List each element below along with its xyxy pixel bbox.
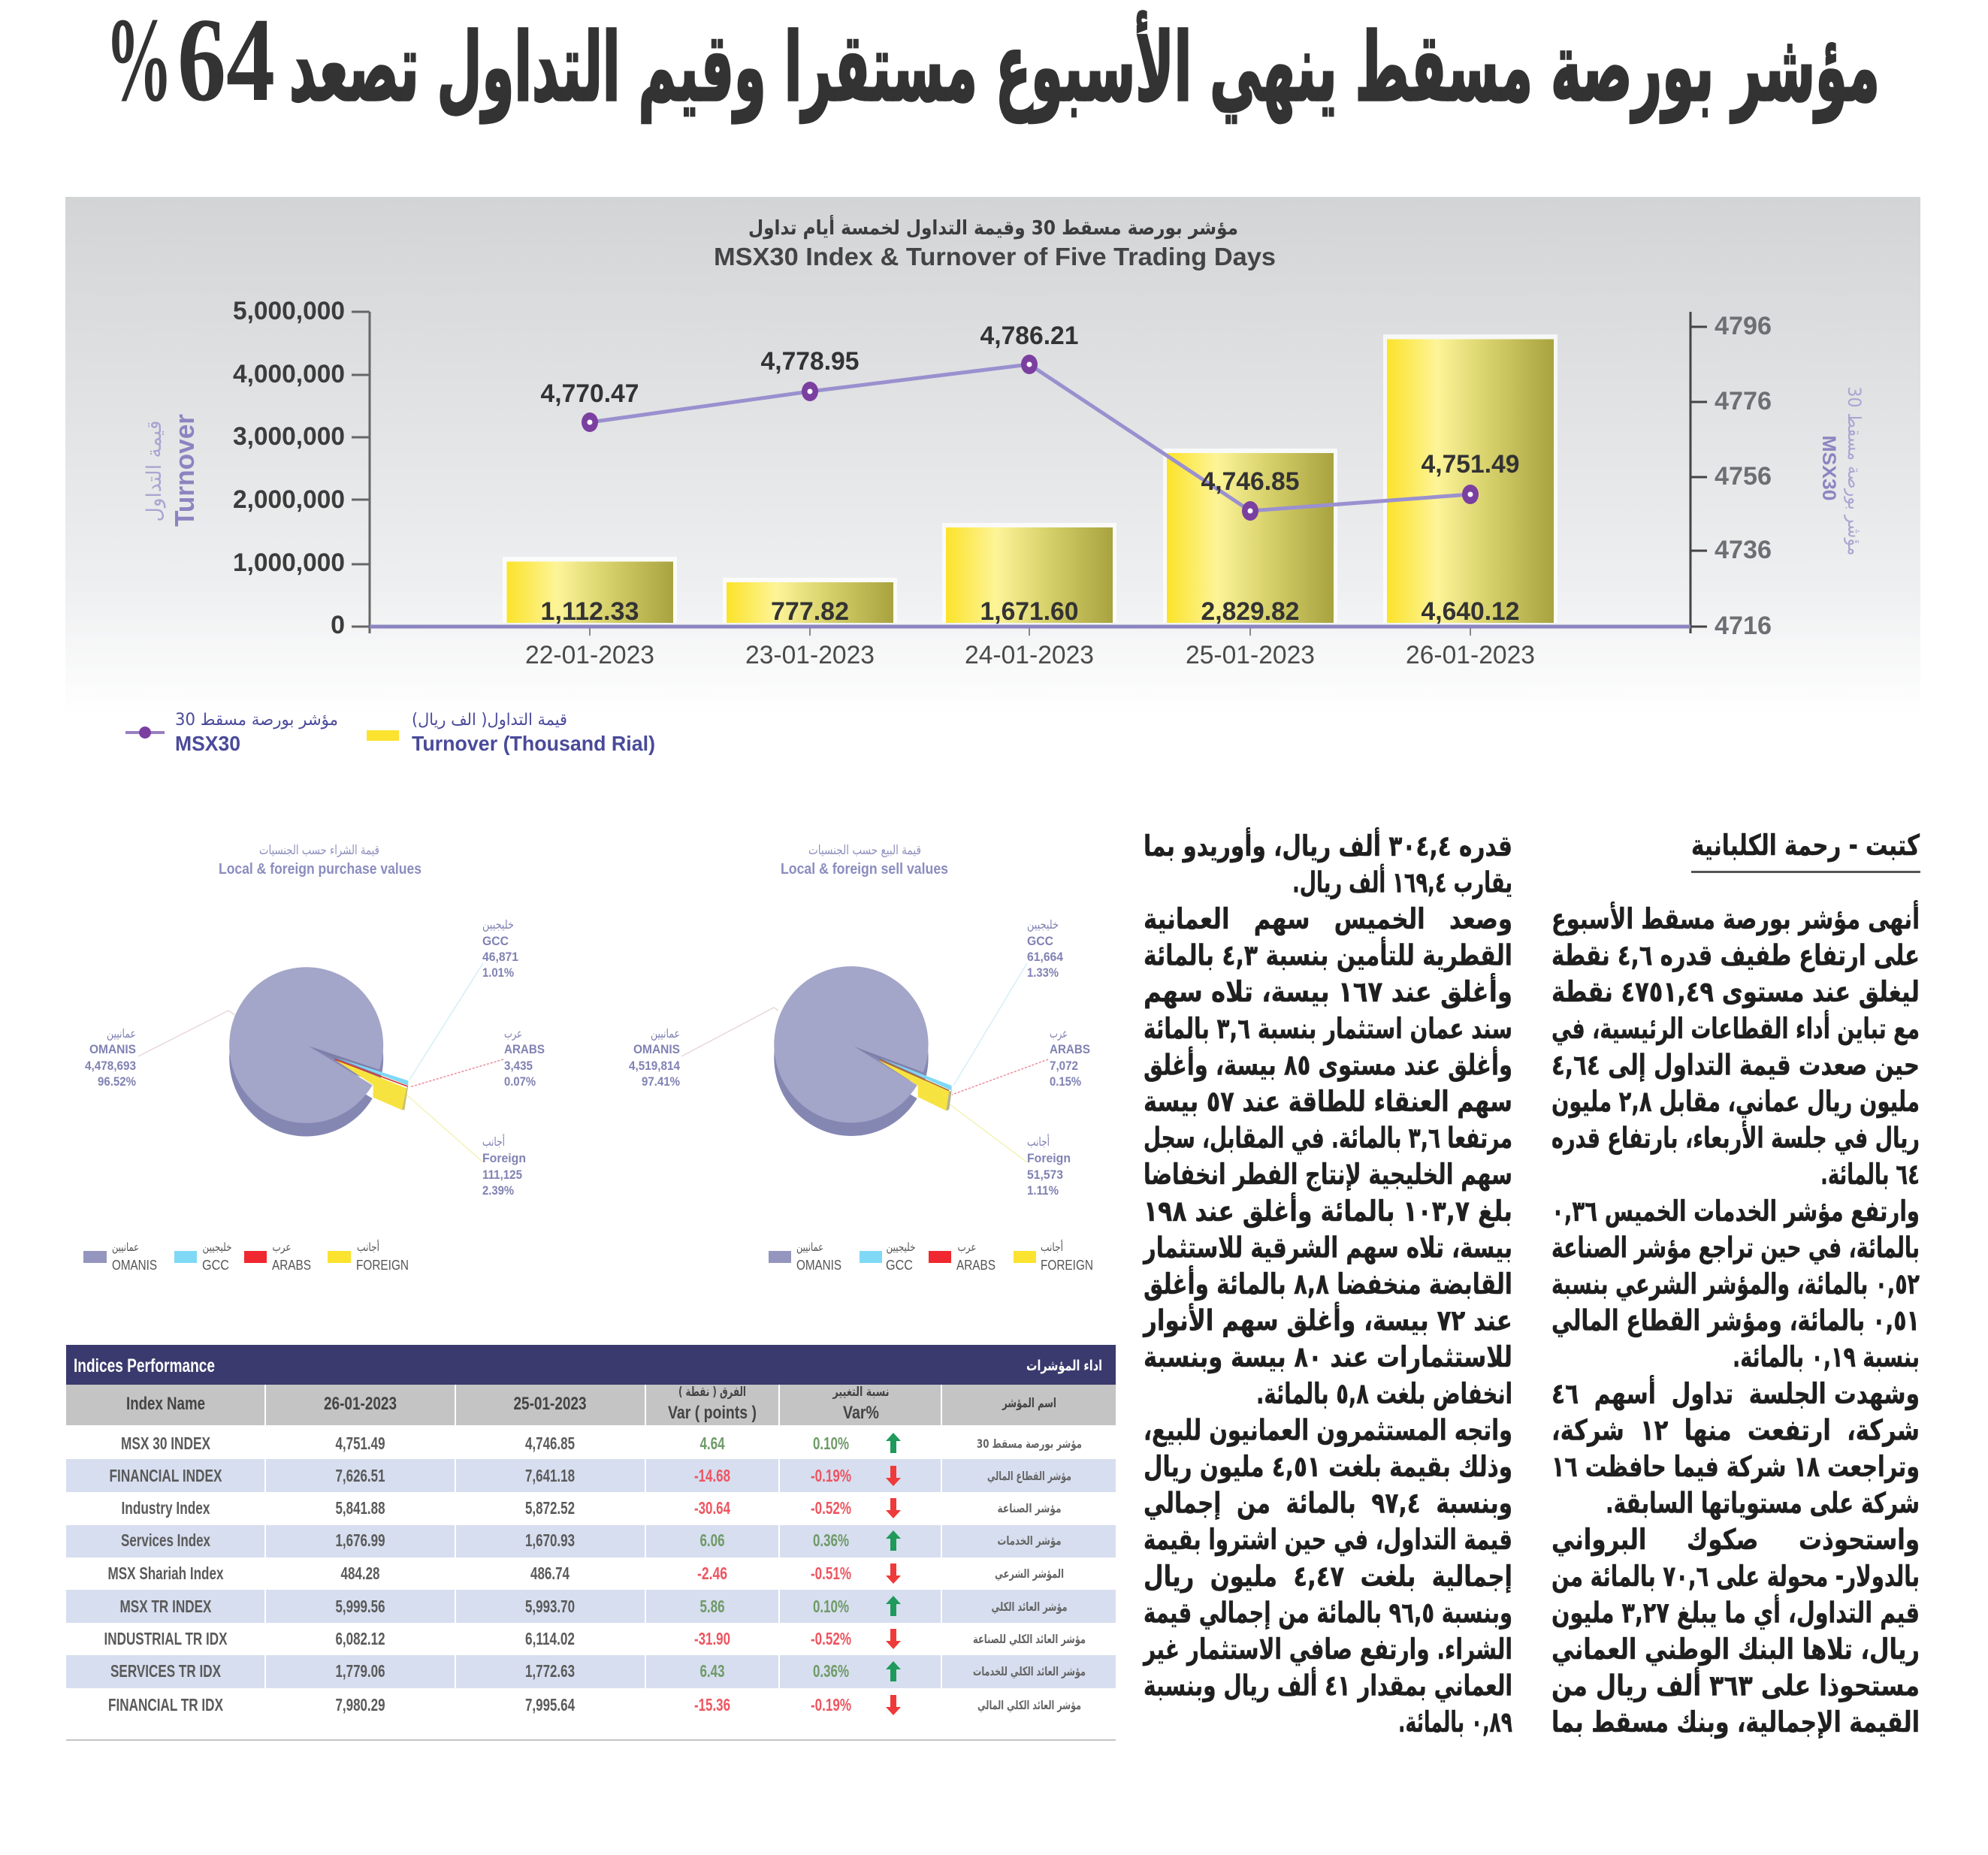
text block: right article column: ٦٤ بالمائة. [1820, 1158, 1920, 1191]
labels [629, 917, 1090, 1198]
row: SERVICES TR IDX: 6.43 [700, 1661, 724, 1681]
pie [229, 967, 408, 1137]
turnover value labels: 4,640.12 [1422, 597, 1519, 626]
text block: left article column: بيسة، تلاه سهم الشرقية للاستثمار [1142, 1231, 1512, 1264]
row: FINANCIAL INDEX: 7,641.18 [525, 1466, 575, 1485]
labels: 0.07% [504, 1074, 536, 1089]
row: MSX TR INDEX: 5.86 [700, 1597, 724, 1616]
table header: 25-01-2023 [514, 1394, 586, 1414]
index value labels: 4,770.47 [541, 379, 639, 408]
row: Services Index: 0.36% [813, 1530, 849, 1550]
baseline [370, 625, 1690, 628]
heading: قيمة الشراء حسب الجنسيات [259, 843, 379, 858]
row: MSX TR INDEX [120, 1596, 1067, 1616]
row: MSX Shariah Index: MSX Shariah Index [108, 1563, 224, 1583]
table header: نسبة التغيير [832, 1385, 890, 1400]
labels: ARABS [1050, 1042, 1090, 1056]
right axis titles: مؤشر بورصة مسقط 30 [1844, 386, 1865, 556]
row: SERVICES TR IDX [110, 1661, 1086, 1681]
row: MSX TR INDEX: MSX TR INDEX [120, 1597, 212, 1616]
chart legend: Turnover (Thousand Rial) [412, 732, 655, 755]
row: Industry Index: -30.64 [694, 1498, 730, 1518]
row: MSX Shariah Index: 486.74 [530, 1563, 570, 1583]
row: MSX TR INDEX: 0.10% [813, 1597, 849, 1616]
line: MSX30 index [582, 355, 1479, 521]
row: MSX TR INDEX: مؤشر العائد الكلي [992, 1600, 1067, 1615]
labels: 51,573 [1027, 1168, 1063, 1182]
turnover value labels: 1,112.33 [541, 597, 639, 626]
row: MSX Shariah Index: 484.28 [341, 1563, 380, 1583]
row: MSX 30 INDEX [121, 1433, 1082, 1453]
right axis [1690, 312, 1772, 640]
heading [781, 843, 948, 878]
legend: عمانيين [112, 1240, 139, 1254]
labels: 1.11% [1027, 1183, 1059, 1198]
text block: left article column: سهم العنقاء للطاقة عند ٥٧ بيسة [1144, 1085, 1512, 1119]
text block: left article column: إجمالية بلغت ٤,٤٧ مليون ريال [1144, 1560, 1512, 1594]
labels: عمانيين [651, 1026, 680, 1041]
labels: 3,435 [504, 1059, 533, 1073]
labels: 1.33% [1027, 965, 1059, 980]
text block: left article column: وبنسبة ٩٦,٥ بالمائة من إجمالي قيمة [1144, 1596, 1512, 1630]
legend: خليجيين [203, 1240, 231, 1254]
row: FINANCIAL INDEX: -0.19% [811, 1466, 851, 1485]
text block: left article column: العماني بمقدار ٤١ ألف ريال وبنسبة [1144, 1667, 1512, 1703]
row: MSX Shariah Index: -2.46 [697, 1563, 727, 1583]
labels: 96.52% [98, 1074, 136, 1089]
index value labels: 4,751.49 [1422, 450, 1519, 479]
row: FINANCIAL TR IDX: 7,995.64 [525, 1695, 575, 1715]
left axis titles: Turnover [169, 414, 200, 527]
chart legend [125, 711, 655, 755]
labels: خليجيين [1027, 917, 1059, 932]
row: FINANCIAL INDEX [110, 1466, 1071, 1486]
legend: ARABS [272, 1258, 311, 1273]
text block: left article column: وأغلق عند مستوى ٨٥ بيسة، وأغلق [1144, 1046, 1512, 1082]
left axis: 2,000,000 [233, 485, 345, 514]
table header: 26-01-2023 [324, 1394, 397, 1414]
turnover value labels: 777.82 [771, 597, 849, 626]
legend [769, 1240, 1093, 1273]
legend: GCC [202, 1258, 229, 1273]
legend: عرب [272, 1240, 292, 1254]
row: INDUSTRIAL TR IDX: 6,082.12 [335, 1629, 385, 1648]
text block: left article column: وبنسبة ٩٧,٤ بالمائة من إجمالي [1144, 1487, 1512, 1521]
date labels: 25-01-2023 [1186, 641, 1315, 669]
labels: 1.01% [482, 965, 514, 980]
labels: أجانب [1027, 1134, 1050, 1149]
labels: 4,519,814 [629, 1059, 680, 1073]
legend: أجانب [357, 1240, 379, 1254]
labels: 0.15% [1050, 1074, 1081, 1089]
left axis: 3,000,000 [233, 422, 345, 451]
table title bar: اداء المؤشرات [1026, 1358, 1102, 1374]
table header [66, 1385, 1116, 1425]
table header: Var ( points ) [668, 1403, 757, 1423]
text block: left article column: واتجه المستثمرون العمانيون للبيع، [1144, 1413, 1512, 1447]
labels: خليجيين [482, 917, 514, 932]
text block: right article column: بنسبة ٠,١٩ بالمائة. [1733, 1340, 1920, 1373]
text block: right article column: وتراجعت ١٨ شركة فيما حافظت ١٦ [1551, 1450, 1920, 1484]
row: SERVICES TR IDX: SERVICES TR IDX [110, 1661, 221, 1681]
row: MSX Shariah Index: -0.51% [811, 1563, 851, 1583]
index value labels [541, 322, 1519, 496]
labels [85, 917, 545, 1198]
text block: left article column: قدره ٣٠٤,٤ ألف ريال، وأوريدو بما [1144, 827, 1512, 863]
left axis: 1,000,000 [233, 548, 345, 577]
row: FINANCIAL TR IDX: 7,980.29 [335, 1695, 385, 1715]
left axis: 4,000,000 [233, 360, 345, 388]
panel: local and foreign purchase values pie [83, 843, 545, 1273]
labels: GCC [482, 934, 509, 948]
right axis: 4776 [1715, 387, 1772, 415]
labels: 4,478,693 [85, 1059, 136, 1073]
row: FINANCIAL TR IDX: مؤشر العائد الكلي المالي [977, 1698, 1081, 1713]
text block: left article column: وأغلق عند ١٦٧ بيسة، تلاه سهم [1144, 973, 1512, 1009]
legend: OMANIS [796, 1258, 841, 1273]
panel: indices performance table [66, 1345, 1116, 1741]
labels: Foreign [482, 1151, 526, 1165]
row: Industry Index: مؤشر الصناعة [998, 1501, 1061, 1515]
row: INDUSTRIAL TR IDX: INDUSTRIAL TR IDX [104, 1629, 228, 1648]
chart legend: مؤشر بورصة مسقط 30 [175, 711, 338, 730]
row: Industry Index: Industry Index [122, 1498, 210, 1518]
panel: MSX30 index and turnover chart [65, 197, 1920, 755]
text block: right article column: شركة، ارتفعت منها ١٢ شركة، [1551, 1413, 1920, 1446]
right axis titles [1818, 386, 1865, 556]
table title bar [66, 1345, 1116, 1385]
row: Services Index: 1,670.93 [525, 1530, 575, 1550]
labels: Foreign [1027, 1151, 1071, 1165]
row: MSX 30 INDEX: 4,751.49 [335, 1434, 385, 1453]
labels: 97.41% [642, 1074, 680, 1089]
row: MSX 30 INDEX: MSX 30 INDEX [121, 1434, 210, 1453]
date labels [525, 641, 1535, 669]
legend: ARABS [956, 1258, 996, 1273]
chart title: MSX30 Index & Turnover of Five Trading Days [714, 243, 1276, 270]
text block: left article column: وذلك بقيمة بلغت ٤,٥١ مليون ريال [1144, 1450, 1512, 1484]
text block: left article column: انخفاض بلغت ٥,٨ بالمائة. [1256, 1377, 1512, 1410]
row: INDUSTRIAL TR IDX: مؤشر العائد الكلي للصناعة [973, 1632, 1086, 1647]
row: FINANCIAL INDEX: FINANCIAL INDEX [110, 1466, 222, 1485]
right axis: 4716 [1715, 612, 1772, 640]
row: INDUSTRIAL TR IDX: -0.52% [811, 1629, 851, 1648]
row: Services Index: 1,676.99 [335, 1530, 385, 1550]
labels: 111,125 [482, 1168, 522, 1182]
legend: GCC [886, 1258, 913, 1273]
left axis [233, 297, 370, 639]
labels: عرب [504, 1026, 522, 1041]
chart legend: MSX30 [175, 732, 240, 755]
chart legend: قيمة التداول( الف ريال) [412, 711, 567, 730]
labels: عمانيين [107, 1026, 136, 1041]
ticks under baseline [590, 628, 1470, 636]
byline [1691, 829, 1920, 873]
row: FINANCIAL TR IDX [108, 1695, 1081, 1715]
text block: left article column: عند ٧٢ بيسة، وأغلق سهم الأنوار [1142, 1302, 1512, 1338]
text block: left article column: يقارب ١٦٩,٤ ألف ريال. [1292, 863, 1512, 899]
row: Industry Index: -0.52% [811, 1498, 851, 1518]
heading [219, 843, 421, 878]
heading: قيمة البيع حسب الجنسيات [808, 843, 921, 858]
row: MSX TR INDEX: 5,993.70 [525, 1597, 575, 1616]
pie [774, 966, 952, 1136]
row: MSX 30 INDEX: مؤشر بورصة مسقط 30 [977, 1437, 1082, 1451]
row: MSX 30 INDEX: 4.64 [700, 1434, 725, 1453]
date labels: 24-01-2023 [965, 641, 1094, 669]
legend: FOREIGN [356, 1258, 409, 1273]
row: FINANCIAL INDEX: مؤشر القطاع المالي [987, 1469, 1071, 1484]
row: Industry Index: 5,841.88 [335, 1498, 385, 1518]
row: SERVICES TR IDX: 1,779.06 [335, 1661, 385, 1681]
row: Services Index: مؤشر الخدمات [998, 1533, 1061, 1548]
column separators [265, 1385, 941, 1688]
text block: left article column: سند عمان استثمار بنسبة ٣,٦ بالمائة [1144, 1012, 1512, 1045]
table bottom rule [66, 1739, 1116, 1741]
right axis: 4756 [1715, 462, 1772, 491]
legend: أجانب [1041, 1240, 1063, 1254]
row: Services Index: 6.06 [700, 1530, 724, 1550]
labels: عرب [1050, 1026, 1068, 1041]
legend: عمانيين [796, 1240, 823, 1254]
labels: OMANIS [633, 1042, 680, 1056]
legend: FOREIGN [1041, 1258, 1093, 1273]
text block: left article column: بلغ ١٠٣,٧ بالمائة وأغلق عند ١٩٨ [1144, 1192, 1512, 1228]
text block: left article column: مرتفعا ٣,٦ بالمائة. في المقابل، سجل [1144, 1122, 1512, 1155]
row: MSX 30 INDEX: 4,746.85 [525, 1434, 575, 1453]
row: INDUSTRIAL TR IDX: 6,114.02 [525, 1629, 575, 1648]
labels: 46,871 [482, 950, 518, 964]
byline: كتبت - رحمة الكلبانية [1691, 829, 1920, 862]
table header: الفرق ( نقطة ) [678, 1385, 746, 1400]
labels: ARABS [504, 1042, 545, 1056]
row: MSX 30 INDEX: 0.10% [813, 1434, 849, 1453]
text block: left article column: قيمة التداول، في حين اشتروا بقيمة [1144, 1523, 1512, 1557]
row: MSX Shariah Index [108, 1563, 1064, 1584]
right axis titles: MSX30 [1818, 436, 1839, 500]
date labels: 26-01-2023 [1406, 641, 1535, 669]
bars: turnover [503, 334, 1557, 623]
table title bar: Indices Performance [74, 1355, 215, 1376]
row: SERVICES TR IDX: مؤشر العائد الكلي للخدمات [973, 1664, 1086, 1679]
index value labels: 4,778.95 [760, 347, 860, 376]
row: SERVICES TR IDX: 1,772.63 [525, 1661, 575, 1681]
row: FINANCIAL TR IDX: -15.36 [694, 1695, 730, 1715]
labels: OMANIS [89, 1042, 136, 1056]
table header: Index Name [126, 1394, 205, 1414]
row: FINANCIAL INDEX: 7,626.51 [335, 1466, 385, 1485]
labels: 61,664 [1027, 950, 1063, 964]
left axis: 5,000,000 [233, 297, 345, 325]
text block: left article column: الشراء. وارتفع صافي الاستثمار غير [1143, 1633, 1512, 1666]
row: FINANCIAL TR IDX: -0.19% [811, 1695, 851, 1715]
text block: left article column [1142, 827, 1512, 1739]
left axis titles: قيمة التداول [143, 421, 166, 521]
text block: left article column: وصعد الخميس سهم العمانية [1144, 902, 1512, 936]
heading: Local & foreign purchase values [219, 861, 421, 878]
text block: right article column: ليغلق عند مستوى ٤٧٥١,٤٩ نقطة [1551, 975, 1920, 1008]
labels: أجانب [482, 1134, 505, 1149]
index value labels: 4,746.85 [1201, 467, 1300, 496]
labels: 2.39% [482, 1183, 514, 1198]
row: MSX Shariah Index: المؤشر الشرعي [995, 1566, 1064, 1582]
row: Services Index: Services Index [121, 1530, 210, 1550]
row: FINANCIAL INDEX: -14.68 [694, 1466, 730, 1485]
date labels: 22-01-2023 [525, 641, 654, 669]
text block: right article column: قيم التداول، أي ما يبلغ ٣,٢٧ مليون [1551, 1594, 1920, 1630]
legend: OMANIS [112, 1258, 157, 1273]
leader lines [138, 963, 503, 1162]
panel: local and foreign sell values pie [629, 843, 1093, 1273]
leader lines [681, 963, 1048, 1162]
legend [83, 1240, 409, 1273]
text block: right article column: بالدولار- محولة على ٧٠,٦ بالمائة من [1551, 1560, 1920, 1594]
text block: left article column: ٠,٨٩ بالمائة. [1398, 1705, 1512, 1739]
row: FINANCIAL TR IDX: FINANCIAL TR IDX [108, 1695, 223, 1715]
chart title [714, 215, 1276, 270]
text block: right article column: مستحوذا على ٣٦٣ ألف ريال من [1551, 1667, 1920, 1702]
index value labels: 4,786.21 [980, 322, 1079, 350]
left axis: 0 [331, 611, 345, 639]
table header: اسم المؤشر [1002, 1396, 1056, 1411]
right axis: 4796 [1715, 312, 1772, 340]
row: MSX TR INDEX: 5,999.56 [335, 1597, 385, 1616]
row: Services Index [121, 1530, 1061, 1551]
legend: خليجيين [887, 1240, 915, 1254]
text block: right article column: ٠,٥١ بالمائة، ومؤشر القطاع المالي [1551, 1304, 1920, 1338]
alternating row bands [66, 1459, 1116, 1688]
text block: left article column: القابضة منخفضا ٨,٨ بالمائة وأغلق [1144, 1265, 1512, 1301]
date labels: 23-01-2023 [745, 641, 875, 669]
labels: 7,072 [1050, 1059, 1078, 1073]
turnover value labels [541, 597, 1519, 626]
row: Industry Index: 5,872.52 [525, 1498, 575, 1518]
chart title: مؤشر بورصة مسقط 30 وقيمة التداول لخمسة أيام تداول [748, 215, 1238, 240]
row: INDUSTRIAL TR IDX [104, 1629, 1086, 1649]
table header: Var% [843, 1403, 879, 1423]
text block: left article column: سهم الخليجية لإنتاج الفطر انخفاضا [1144, 1158, 1512, 1192]
text block: left article column: للاستثمارات عند ٨٠ بيسة وبنسبة [1144, 1340, 1512, 1374]
heading: Local & foreign sell values [781, 861, 948, 878]
text block: left article column: القطرية للتأمين بنسبة ٤,٣ بالمائة [1144, 937, 1512, 972]
labels: GCC [1027, 934, 1053, 948]
text block: right article column [1551, 900, 1920, 1739]
left axis titles [143, 414, 200, 527]
row: INDUSTRIAL TR IDX: -31.90 [694, 1629, 730, 1648]
right axis: 4736 [1715, 536, 1772, 564]
row: SERVICES TR IDX: 0.36% [813, 1661, 849, 1681]
turnover value labels: 2,829.82 [1201, 597, 1300, 626]
legend: عرب [957, 1240, 977, 1254]
row: Industry Index [122, 1498, 1061, 1518]
turnover value labels: 1,671.60 [980, 597, 1079, 626]
